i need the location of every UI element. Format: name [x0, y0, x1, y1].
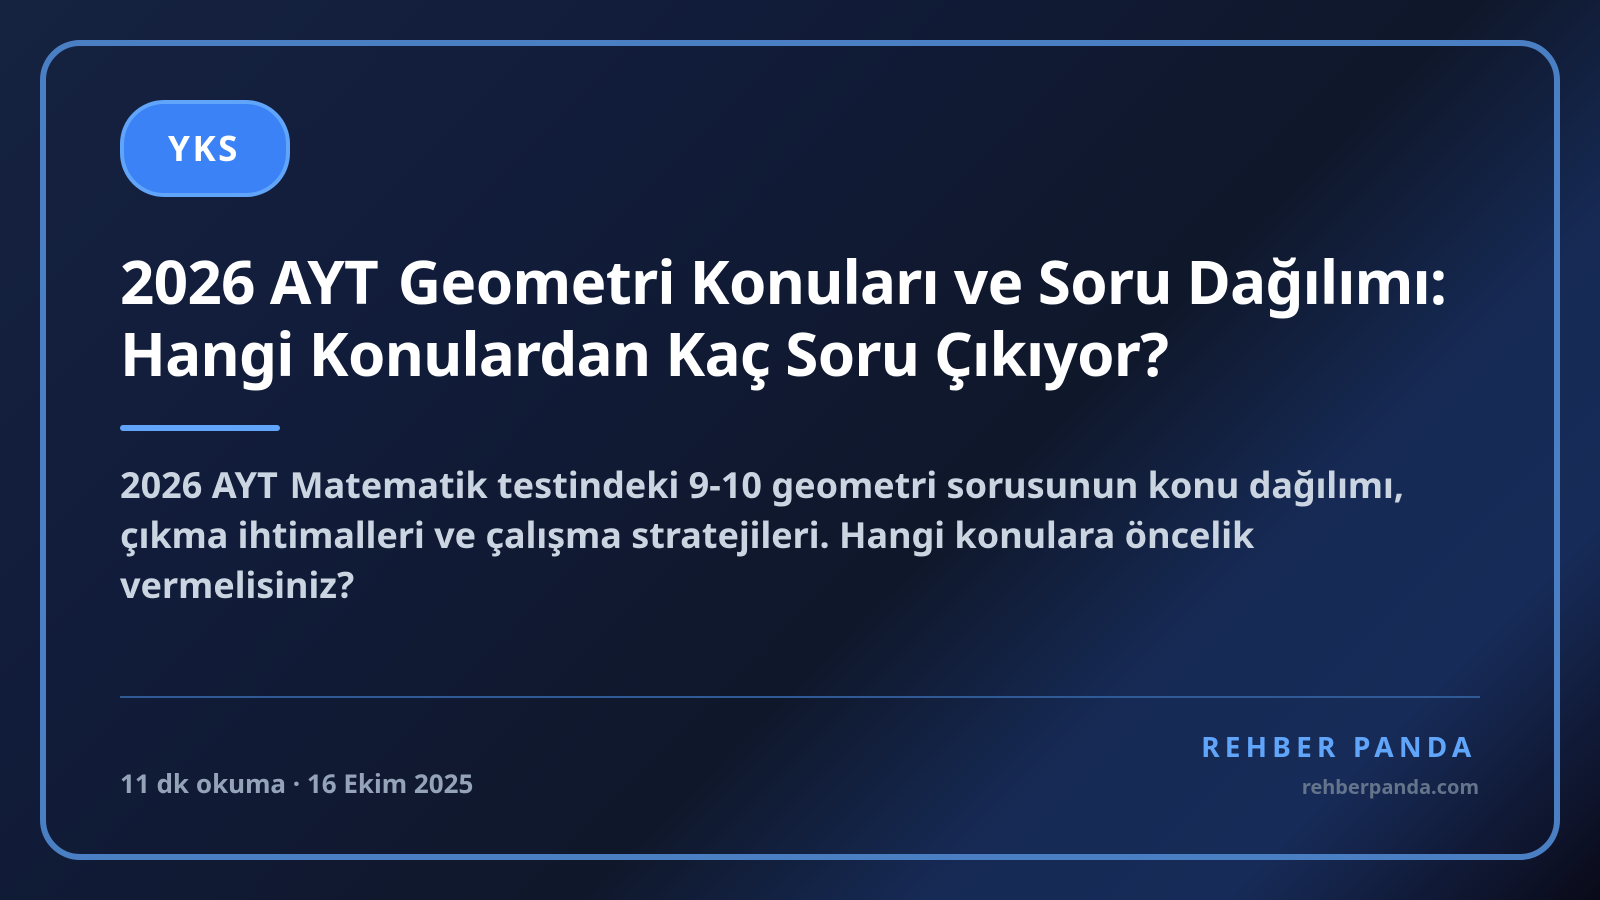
badge: YKS [120, 100, 290, 197]
reading time and date: 11 dk okuma · 16 Ekim 2025 [120, 765, 473, 801]
accent bar [120, 425, 280, 431]
description text: vermelisiniz? [120, 560, 354, 609]
website url: rehberpanda.com [1302, 773, 1479, 800]
brand name: REHBER PANDA [1201, 728, 1476, 766]
footer divider [120, 696, 1480, 698]
title [120, 240, 1446, 394]
description text: çıkma ihtimalleri ve çalışma stratejileri. Hangi konulara öncelik [120, 510, 1254, 559]
description text: 2026 AYT Matematik testindeki 9-10 geometri sorusunun konu dağılımı, [120, 460, 1404, 509]
title: 2026 AYT Geometri Konuları ve Soru Dağılımı: [120, 240, 1446, 322]
description text [120, 460, 1404, 609]
title: Hangi Konulardan Kaç Soru Çıkıyor? [120, 312, 1168, 394]
badge: YKS: YKS [168, 125, 240, 172]
